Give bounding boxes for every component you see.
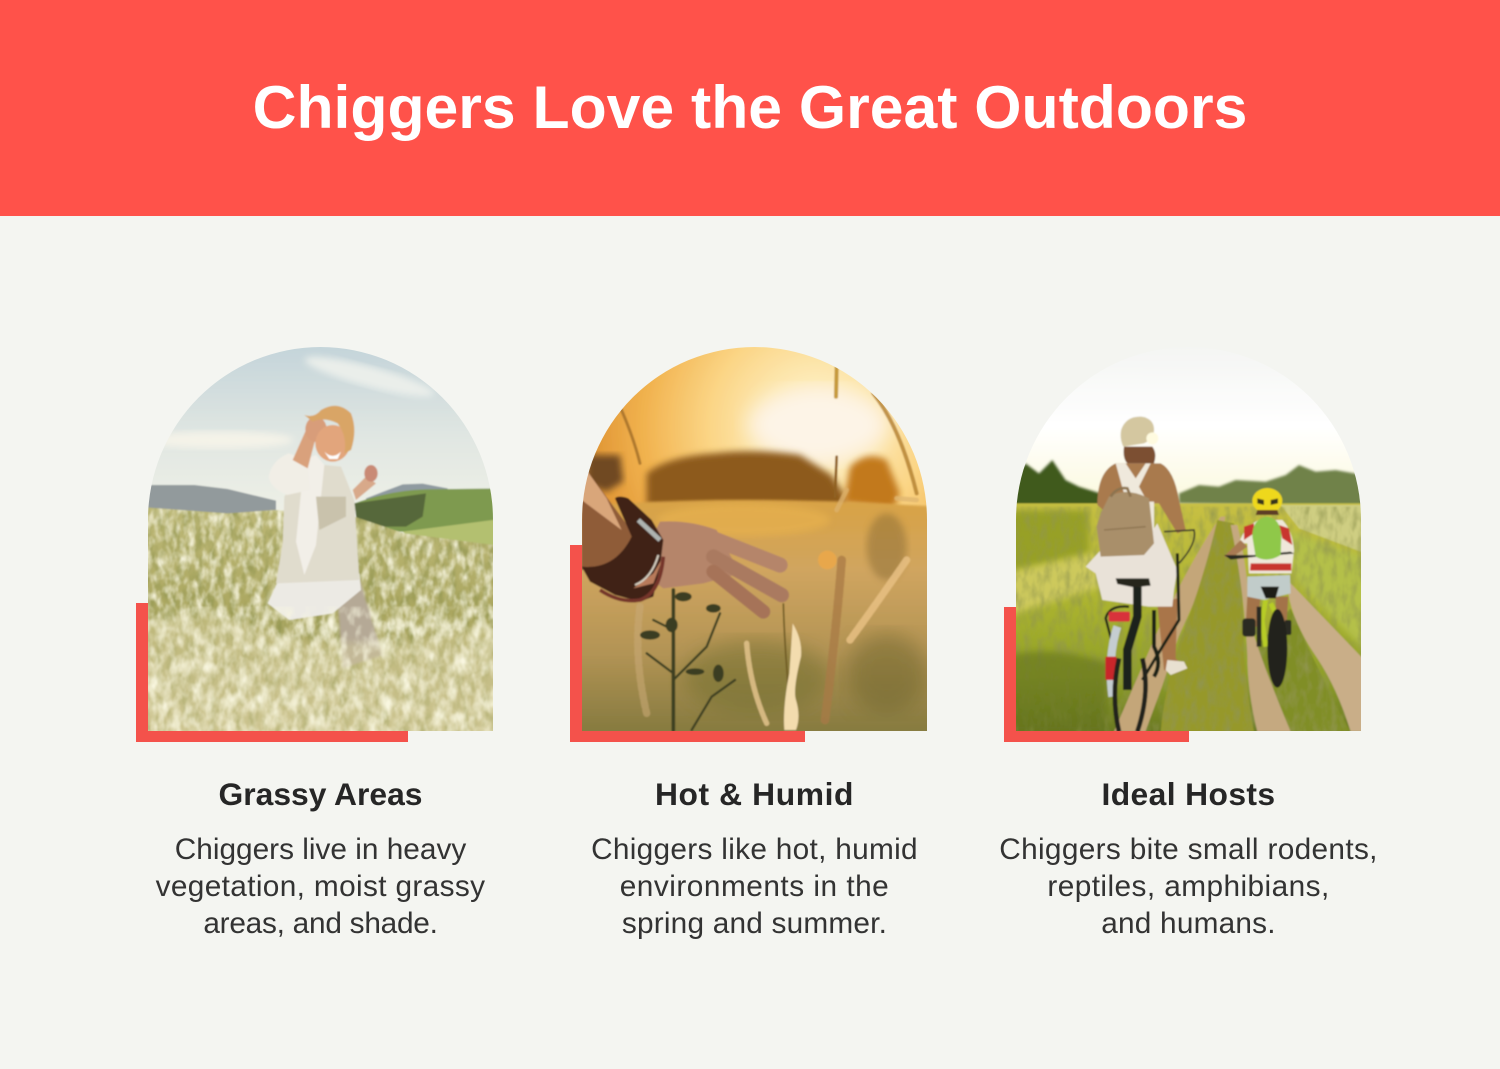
text: grassy areas: vegetation, moist grassy bbox=[156, 870, 485, 903]
text: ideal hosts: and humans. bbox=[1101, 907, 1276, 940]
title: Chiggers Love the Great Outdoors bbox=[253, 73, 1247, 141]
woman cyclist bbox=[1086, 417, 1195, 732]
text: hot and humid: spring and summer. bbox=[622, 907, 887, 940]
pale grass seed head bbox=[782, 602, 788, 682]
photo: hand touching grass at sunset bbox=[570, 340, 940, 733]
text: ideal hosts: Chiggers bite small rodents, bbox=[999, 833, 1378, 866]
woman bbox=[268, 406, 383, 668]
arm and hand bbox=[582, 463, 782, 612]
text: ideal hosts: reptiles, amphibians, bbox=[1047, 870, 1330, 903]
heading: hot and humid: Hot & Humid bbox=[655, 776, 854, 812]
text: hot and humid: environments in the bbox=[620, 870, 889, 903]
accent bracket: hot and humid bbox=[570, 545, 805, 742]
heading: grassy areas: Grassy Areas bbox=[219, 776, 422, 812]
text: grassy areas: Chiggers live in heavy bbox=[175, 833, 466, 866]
child cyclist bbox=[1224, 488, 1294, 688]
text: hot and humid bbox=[591, 833, 918, 940]
text: grassy areas: areas, and shade. bbox=[203, 907, 438, 940]
photo panels bbox=[136, 347, 1361, 742]
photo: woman and child cycling on a path bbox=[1016, 388, 1361, 731]
accent bracket: grassy areas bbox=[136, 603, 408, 742]
accent bracket: ideal hosts bbox=[1004, 607, 1189, 742]
dirt paths bbox=[1114, 517, 1225, 732]
stalks in the background bbox=[620, 367, 917, 723]
foreground grass bbox=[148, 615, 493, 731]
distant trees bbox=[1016, 458, 1100, 505]
dark wildflower plant bbox=[647, 590, 735, 730]
text: grassy areas bbox=[156, 833, 485, 940]
header band bbox=[0, 0, 1500, 216]
text: ideal hosts bbox=[999, 833, 1378, 940]
heading: ideal hosts: Ideal Hosts bbox=[1101, 776, 1276, 812]
text: hot and humid: Chiggers like hot, humid bbox=[591, 833, 918, 866]
photo: woman in tall grass bbox=[148, 347, 493, 731]
